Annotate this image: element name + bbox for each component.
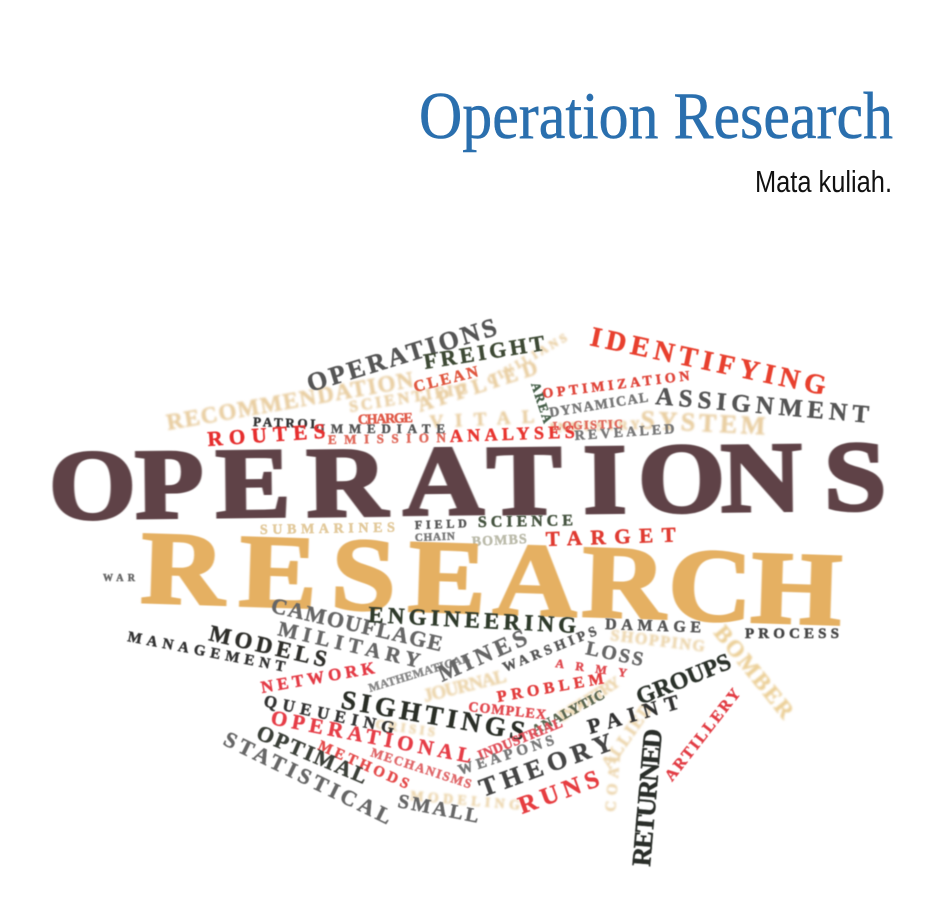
lower cluster words: ARTILLERY (662, 685, 744, 784)
lower cluster words: MECHANISMS (369, 745, 474, 791)
faint tan background words, upper cluster: APPLIED (414, 355, 540, 417)
upper cluster words: ANALYSES (449, 422, 575, 446)
lower cluster words: MANAGEMENT (126, 629, 286, 675)
faint tan background words, lower cluster: COAL (603, 751, 624, 812)
lower cluster words: ARMY (555, 656, 628, 680)
upper cluster words: CLEAN (412, 363, 480, 396)
lower cluster words: MATHEMATICAL (367, 651, 471, 695)
faint tan background words, upper cluster (165, 330, 766, 441)
lower cluster words: DAMAGE (605, 616, 701, 636)
lower cluster words: OPERATIONAL (269, 705, 474, 768)
middle band words: SCIENCE (478, 512, 573, 531)
lower cluster words: STATISTICAL (220, 726, 396, 829)
middle band words: BOMBS (471, 532, 527, 550)
upper cluster words: EMISSION (328, 430, 447, 447)
upper cluster words: AREA (528, 380, 556, 425)
faint tan background words, lower cluster: JOURNAL (421, 666, 509, 707)
lower cluster words: ANALYTIC (530, 688, 608, 739)
upper cluster words: LOGISTIC (553, 417, 623, 433)
faint tan background words, upper cluster: SCIENTIFIC (348, 380, 469, 416)
lower cluster words: INDUSTRIAL (476, 716, 565, 764)
lower cluster words: QUEUEING (262, 691, 396, 738)
lower cluster words (126, 593, 839, 868)
middle band words: FIELD (415, 516, 467, 532)
lower cluster words: MILITARY (276, 616, 423, 672)
lower cluster words: LOSS (584, 637, 645, 671)
big word: OPERATIONS: OPERATIONS (48, 420, 887, 541)
lower cluster words: PROCESS (745, 626, 839, 642)
middle band words: SUBMARINES (260, 521, 395, 538)
faint tan background words, upper cluster: RECOMMENDATION (165, 367, 415, 435)
subtitle: Mata kuliah. (755, 164, 892, 199)
faint tan background words, lower cluster (375, 620, 799, 814)
middle band words: CHAIN (415, 531, 455, 544)
upper cluster words: IDENTIFYING (588, 322, 829, 402)
lower cluster words: METHODS (315, 738, 411, 793)
upper cluster words (207, 312, 870, 451)
faint tan background words, upper cluster: CIVILIANS (484, 330, 570, 388)
upper cluster words: PATROL (253, 414, 320, 431)
faint tan background words, lower cluster: CRISIS (375, 716, 436, 739)
lower cluster words: PROBLEM (496, 670, 605, 706)
faint tan background words, lower cluster: BOMBER (709, 620, 799, 723)
middle band words: WAR (103, 573, 136, 584)
faint tan background words, upper cluster: INDUSTRY (550, 417, 641, 435)
lower cluster words: SIGHTINGS (339, 684, 527, 746)
upper cluster words: OPERATIONS (303, 312, 500, 398)
lower cluster words: COMPLEX (468, 700, 547, 723)
faint tan background words, lower cluster: SHOPPING (610, 627, 706, 656)
upper cluster words: IMMEDIATE (320, 421, 445, 436)
upper cluster words: OPTIMIZATION (542, 369, 690, 402)
lower cluster words: RETURNED (626, 727, 668, 868)
lower cluster words: THEORY (475, 727, 617, 803)
faint tan background words, lower cluster: MODELING (410, 789, 521, 814)
lower cluster words: WEAPONS (456, 733, 556, 779)
lower cluster words: CAMOUFLAGE (269, 593, 445, 656)
faint tan background words, upper cluster: VITAL (429, 407, 535, 433)
lower cluster words: NETWORK (259, 658, 377, 697)
lower cluster words: SMALL (396, 790, 481, 828)
upper cluster words: CHARGE (358, 411, 413, 428)
middle band words (103, 512, 676, 584)
faint tan background words, lower cluster: ALLIED (597, 699, 656, 772)
lower cluster words: RUNS (515, 766, 603, 820)
lower cluster words: MODELS (207, 621, 329, 672)
lower cluster words: GROUPS (633, 649, 735, 711)
upper cluster words: FREIGHT (422, 330, 547, 374)
faint tan background words, lower cluster: INDUSTRY (555, 674, 624, 725)
middle band words: TARGET (545, 522, 676, 551)
lower cluster words: OPTIMAL (253, 720, 371, 789)
upper cluster words: ASSIGNMENT (654, 383, 870, 429)
big word: RESEARCH: RESEARCH (139, 510, 843, 647)
word cloud (48, 312, 887, 868)
lower cluster words: ENGINEERING (368, 602, 577, 638)
upper cluster words: DYNAMICAL (548, 390, 649, 421)
upper cluster words: REVEALED (574, 422, 675, 444)
lower cluster words: WARSHIPS (501, 624, 599, 676)
lower cluster words: MINES (434, 625, 531, 687)
lower cluster words: PAINT (585, 690, 682, 739)
faint tan background words, upper cluster: SYSTEM (640, 405, 766, 441)
upper cluster words: ROUTES (207, 419, 326, 451)
